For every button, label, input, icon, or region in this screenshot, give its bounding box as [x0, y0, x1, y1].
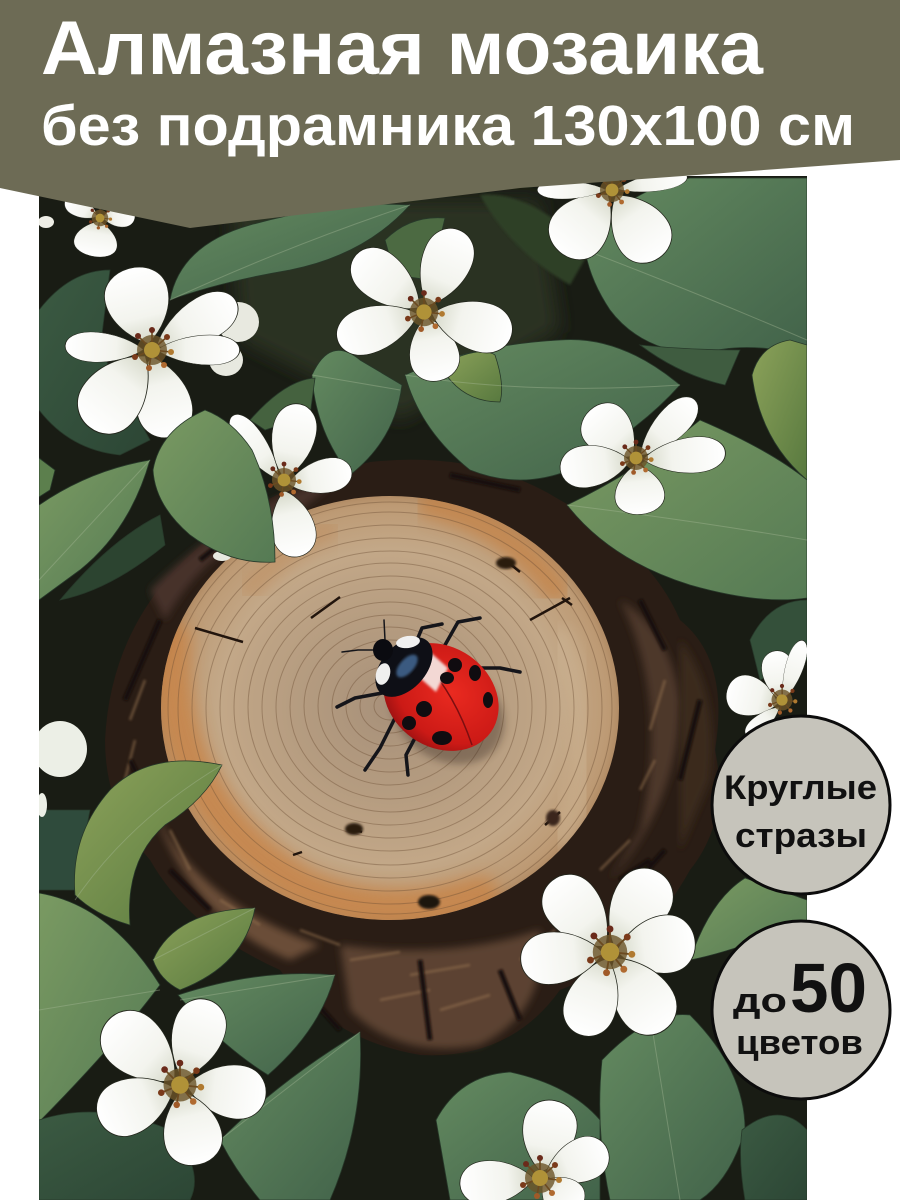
- flower: top: [537, 176, 688, 264]
- flower: upper left: [64, 260, 259, 446]
- flower: bottom right: [520, 868, 696, 1036]
- stump bark: [105, 460, 719, 1055]
- flower: bottom centre: [458, 1096, 616, 1200]
- ladybug legs: [337, 618, 520, 775]
- flowers: [33, 168, 812, 1200]
- ladybug pronotum and head: [375, 638, 433, 697]
- badge: round rhinestones: стразы: [735, 817, 867, 855]
- flower: bottom left: [96, 998, 266, 1166]
- ladybug shell: [384, 643, 499, 751]
- cut surface: [161, 496, 619, 920]
- flower: behind leaf: [213, 400, 355, 561]
- cracks and knots: [195, 560, 572, 855]
- badge: up to 50 colours: цветов: [736, 1024, 863, 1062]
- photo: ladybug on a tree stump among leaves and flowers: [33, 168, 812, 1200]
- flower: right edge: [726, 640, 807, 734]
- flower: top left small: [39, 202, 135, 257]
- badge: round rhinestones: Круглые: [724, 769, 877, 807]
- badge: round rhinestones: [712, 716, 890, 894]
- growth rings: [168, 502, 612, 914]
- badge: up to 50 colours: до: [733, 982, 787, 1020]
- flower: left edge: [39, 721, 87, 817]
- subtitle: без подрамника 130х100 см: [41, 94, 855, 158]
- ladybug spots: [402, 658, 493, 745]
- tree stump: [105, 460, 719, 1055]
- flower: upper centre: [336, 228, 513, 382]
- badge: up to 50 colours: [712, 921, 890, 1099]
- ladybug: [337, 618, 525, 786]
- leaf veins: [39, 205, 807, 1200]
- leaf overlapping flower: [153, 410, 275, 562]
- orange crescent bands: [172, 505, 584, 908]
- header banner: [0, 0, 900, 228]
- leaves: [39, 178, 807, 1200]
- badge: up to 50 colours: 50: [790, 949, 867, 1027]
- flower: right of centre: [557, 389, 727, 517]
- title: Алмазная мозаика: [41, 6, 764, 91]
- bark flecks: [125, 680, 665, 1010]
